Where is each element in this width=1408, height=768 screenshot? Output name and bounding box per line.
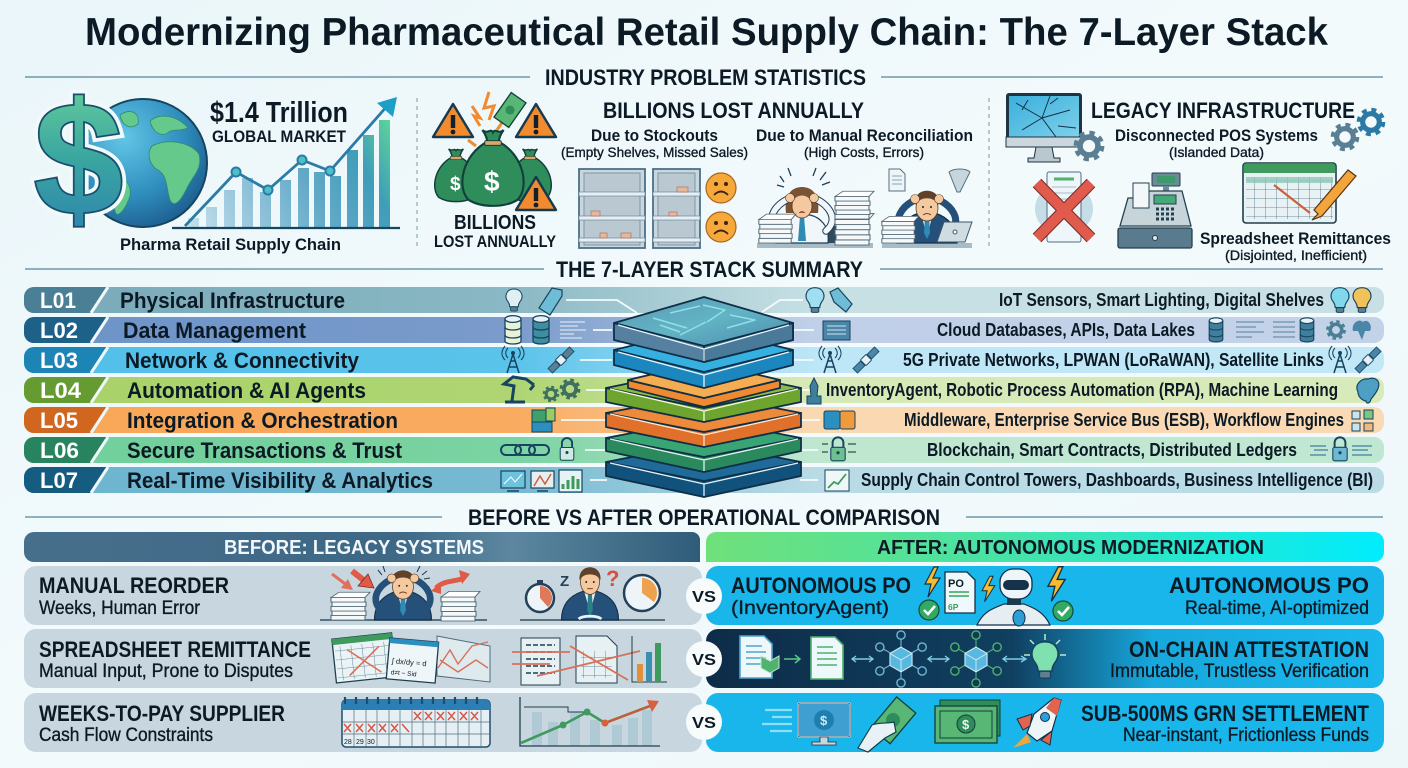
VS badge row 3: VS xyxy=(692,715,716,732)
layer: green automation xyxy=(606,362,801,422)
icon: stressed workers xyxy=(757,168,972,248)
icon: waiting worker with clocks xyxy=(520,566,665,620)
icon: waiting worker with clocks: Z xyxy=(560,573,569,590)
panel: global market xyxy=(34,69,400,254)
layer row L03 xyxy=(24,347,1384,373)
layer row L05: Integration & Orchestration xyxy=(127,408,398,433)
after row: sub-500ms GRN settlement: Near-instant, Frictionless Funds xyxy=(1123,725,1369,746)
icon: instant payment and rocket: $ xyxy=(962,717,970,732)
after row: autonomous PO xyxy=(706,566,1384,626)
icons: L02 data xyxy=(1209,318,1371,342)
layer row L06: L06 xyxy=(40,438,79,463)
after row: autonomous PO: AUTONOMOUS PO xyxy=(1169,573,1369,598)
layer row L04: L04 xyxy=(40,378,82,403)
icon: puzzle xyxy=(532,408,555,432)
stat: $1.4 trillion: $1.4 Trillion xyxy=(210,97,348,129)
layer row L02: L02 xyxy=(40,318,78,343)
VS badge row 2 xyxy=(686,641,722,677)
icon: spreadsheet and pencil xyxy=(1243,163,1356,223)
after header xyxy=(706,532,1384,562)
layer row L03: L03 xyxy=(40,348,78,373)
before header: BEFORE: LEGACY SYSTEMS xyxy=(224,536,484,559)
icon: databases xyxy=(505,316,586,344)
after row: autonomous PO: Real-time, AI-optimized xyxy=(1185,598,1369,619)
icon: agent xyxy=(807,378,821,404)
icon: money bags and warnings: $ xyxy=(484,166,500,197)
stat: billions: BILLIONS xyxy=(454,212,536,234)
panel: layer rows xyxy=(24,287,1384,493)
layer row L05 xyxy=(24,407,1384,433)
icon: waiting worker with clocks: ? xyxy=(606,566,619,591)
after row: on-chain attestation xyxy=(706,629,1384,688)
icon: antenna xyxy=(502,346,524,373)
icon: crossed-out invoices and bars xyxy=(512,636,667,685)
before row: manual reorder: Weeks, Human Error xyxy=(39,598,201,619)
icon: error-filled spreadsheets xyxy=(332,633,490,683)
layer row L07: Real-Time Visibility & Analytics xyxy=(127,468,433,493)
connector lines xyxy=(561,300,820,480)
icon: robot arm xyxy=(504,377,534,402)
layer: orange xyxy=(606,394,801,447)
before row: weeks-to-pay supplier: Cash Flow Constraints xyxy=(39,725,213,746)
layer row L02: Data Management xyxy=(123,318,307,343)
layer: navy xyxy=(606,443,801,497)
layer row L01: IoT Sensors, Smart Lighting, Digital Shelves xyxy=(999,290,1324,310)
icons: right of stack xyxy=(806,288,1382,491)
before row: weeks-to-pay supplier xyxy=(24,693,702,752)
after header: AFTER: AUTONOMOUS MODERNIZATION xyxy=(877,536,1264,559)
subhead: due to stockouts: Due to Stockouts xyxy=(591,127,718,145)
layer row L04: Automation & AI Agents xyxy=(127,378,366,403)
subhead: due to manual reconciliation: Due to Manual Reconciliation xyxy=(756,127,973,145)
panel: before legacy systems xyxy=(24,532,702,752)
icon: empty shelves xyxy=(579,169,700,248)
icons: L03 network xyxy=(1329,346,1382,374)
layer row L06 xyxy=(24,437,1384,463)
icon: instant payment and rocket xyxy=(762,697,1061,752)
icon: globe xyxy=(79,99,207,227)
icon: calendar: 28 xyxy=(344,739,352,746)
after row: autonomous PO: AUTONOMOUS PO xyxy=(731,573,911,598)
bar chart: market growth xyxy=(172,97,400,228)
before row: spreadsheet remittance: Manual Input, Prone to Disputes xyxy=(39,661,293,682)
panel: legacy infrastructure xyxy=(1006,93,1391,263)
icon: chart xyxy=(825,470,849,491)
after row: on-chain attestation: ON-CHAIN ATTESTATION xyxy=(1129,637,1369,662)
icon: purchase order and robot: 6P xyxy=(948,602,959,612)
layer row L07 xyxy=(24,467,1384,493)
VS badge row 1: VS xyxy=(692,589,716,606)
section header: industry problem statistics: INDUSTRY PROBLEM STATISTICS xyxy=(545,65,866,90)
icon: brain xyxy=(1357,378,1379,403)
before row: spreadsheet remittance xyxy=(24,629,702,688)
caption: pharma retail supply chain: Pharma Retail Supply Chain xyxy=(120,235,341,254)
icon: purchase order and robot: PO xyxy=(948,578,964,590)
icons: left of stack xyxy=(501,288,586,492)
layer row L01 xyxy=(24,287,1384,313)
icon: cash register xyxy=(1118,173,1192,248)
before row: spreadsheet remittance: SPREADSHEET REMITTANCE xyxy=(39,637,311,662)
icon: overwhelmed worker with paper xyxy=(320,566,487,621)
icon: lock xyxy=(560,438,574,460)
layer row L02: Cloud Databases, APIs, Data Lakes xyxy=(937,320,1195,340)
layer row L06: Blockchain, Smart Contracts, Distributed Ledgers xyxy=(927,440,1297,460)
stat label: lost annually: LOST ANNUALLY xyxy=(434,233,556,251)
layer row L02 xyxy=(24,317,1384,343)
before row: manual reorder xyxy=(24,566,702,625)
layer: blue xyxy=(614,328,793,388)
icon: satellite xyxy=(547,346,575,374)
label: spreadsheet remittances: Spreadsheet Remittances xyxy=(1200,230,1391,248)
heading: billions lost annually: BILLIONS LOST ANNUALLY xyxy=(603,98,864,123)
icon: calendar: 30 xyxy=(367,739,375,746)
note: high costs: (High Costs, Errors) xyxy=(804,144,924,160)
VS badge row 3 xyxy=(686,704,722,740)
icon: calendar xyxy=(342,697,490,747)
icon: money bags and warnings: $ xyxy=(450,174,461,195)
icon: dashboards xyxy=(501,470,582,492)
after row: sub-500ms GRN settlement xyxy=(706,693,1384,752)
layer row L06: Secure Transactions & Trust xyxy=(127,438,403,463)
icon: money bags and warnings xyxy=(433,92,556,210)
icon: secured circuits xyxy=(1310,437,1372,461)
icon: error-filled spreadsheets: d≠t − Sid xyxy=(391,669,417,678)
layer row L01: L01 xyxy=(40,288,76,313)
layer row L03: Network & Connectivity xyxy=(125,348,360,373)
icon: tower and satellite xyxy=(819,346,880,374)
icon: dollar sign: $ xyxy=(34,69,123,248)
icon: gears xyxy=(544,380,579,401)
before row: weeks-to-pay supplier: WEEKS-TO-PAY SUPPLIER xyxy=(39,701,285,726)
icon: instant payment and rocket: $ xyxy=(820,713,828,728)
icons: L01 bulbs xyxy=(1331,288,1371,312)
after row: autonomous PO: (InventoryAgent) xyxy=(731,598,889,619)
icon: table xyxy=(823,321,850,340)
icon: crossed-out document xyxy=(1035,172,1093,242)
before header xyxy=(24,532,700,562)
icon: seven layer stack xyxy=(606,297,801,497)
section header: before vs after: BEFORE VS AFTER OPERATIONAL COMPARISON xyxy=(468,505,940,530)
layer row L07: L07 xyxy=(40,468,78,493)
layer: green xyxy=(606,419,801,472)
VS badge row 1 xyxy=(686,578,722,614)
icon: lock with circuits xyxy=(822,437,856,461)
VS badge row 2: VS xyxy=(692,652,716,669)
layer row L04 xyxy=(24,377,1384,403)
layer row L01: Physical Infrastructure xyxy=(120,288,345,313)
panel: after autonomous modernization xyxy=(706,532,1384,752)
icon: sad faces xyxy=(706,173,736,242)
stat label: global market: GLOBAL MARKET xyxy=(212,127,347,146)
heading: legacy infrastructure: LEGACY INFRASTRUCTURE xyxy=(1091,98,1355,123)
note: empty shelves: (Empty Shelves, Missed Sales) xyxy=(561,144,748,160)
title: Modernizing Pharmaceutical Retail Supply Chain: The 7-Layer Stack xyxy=(85,11,1329,54)
icon: chain xyxy=(501,445,549,455)
after row: on-chain attestation: Immutable, Trustless Verification xyxy=(1110,661,1369,682)
subhead: disconnected pos systems: Disconnected POS Systems xyxy=(1115,127,1318,145)
note: islanded data: (Islanded Data) xyxy=(1169,144,1264,160)
after row: sub-500ms GRN settlement: SUB-500MS GRN SETTLEMENT xyxy=(1081,701,1369,726)
layer: top plate xyxy=(614,297,793,362)
icon: bulb xyxy=(506,289,522,311)
icon: purchase order and robot xyxy=(919,567,1073,626)
icon: calendar: 29 xyxy=(356,739,364,746)
icon: gears xyxy=(1333,110,1383,149)
layer row L03: 5G Private Networks, LPWAN (LoRaWAN), Satellite Links xyxy=(903,350,1324,370)
note: disjointed inefficient: (Disjointed, Inefficient) xyxy=(1225,247,1367,263)
icon: dollar sign: $ xyxy=(34,69,123,248)
icon: cracked monitor xyxy=(1006,93,1102,162)
icon: attestation flow xyxy=(740,631,1066,687)
icon: puzzle xyxy=(824,411,855,429)
icon: error-filled spreadsheets: ∫ dx/dy = d xyxy=(390,656,427,668)
VS badges xyxy=(686,578,722,740)
before row: manual reorder: MANUAL REORDER xyxy=(39,573,229,598)
icon: tag xyxy=(539,288,562,315)
layer row L05: L05 xyxy=(40,408,78,433)
panel: billions lost annually xyxy=(433,92,973,251)
icon: bulb and tag xyxy=(806,288,852,312)
icon: cash flow chart xyxy=(520,697,660,746)
icon: workflow xyxy=(1352,410,1373,431)
section header: 7-layer stack summary: THE 7-LAYER STACK SUMMARY xyxy=(556,257,863,282)
